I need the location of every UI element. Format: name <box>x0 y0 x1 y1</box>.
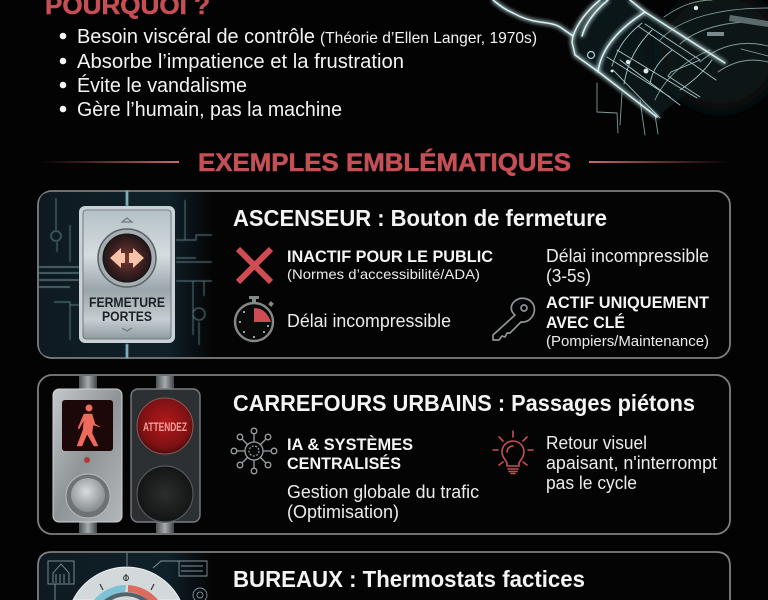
heading: BUREAUX : Thermostats factices <box>233 566 585 592</box>
feedback text: Retour visuel <box>546 433 647 453</box>
heading: ASCENSEUR : Bouton de fermeture <box>233 205 607 231</box>
icon: neural network <box>231 428 277 474</box>
ai systems text: Gestion globale du trafic <box>287 482 479 502</box>
ai systems text: (Optimisation) <box>287 502 399 522</box>
round button <box>98 229 156 287</box>
active text: (Pompiers/Maintenance) <box>546 333 709 350</box>
bullet 3: Évite le vandalisme <box>77 74 247 97</box>
bullet 1: Besoin viscéral de contrôle <box>77 26 315 48</box>
circuit nodes <box>611 60 648 74</box>
ai systems text: IA & SYSTÈMES <box>287 435 413 454</box>
finger body haze <box>572 0 725 117</box>
button plate <box>79 206 175 343</box>
panel border <box>38 552 730 600</box>
image: elevator button: PORTES <box>102 309 152 324</box>
ai systems text <box>287 435 479 522</box>
active text: AVEC CLÉ <box>546 313 625 332</box>
button label: FERMETURE <box>89 295 165 310</box>
image: elevator button <box>39 191 216 358</box>
icon: light bulb <box>493 431 533 474</box>
icon: key <box>493 298 534 340</box>
image: pedestrian signals: ATTENDEZ <box>143 422 187 434</box>
illustration: glowing circuit finger <box>493 0 768 135</box>
pedestrian unit <box>53 389 122 522</box>
inactive text: (Normes d’accessibilité/ADA) <box>287 266 480 282</box>
feedback text: apaisant, n'interrompt <box>546 453 717 473</box>
bullet 1: (Théorie d’Ellen Langer, 1970s) <box>320 30 537 47</box>
delay detail: (3-5s) <box>546 266 591 286</box>
dial segments <box>694 6 768 36</box>
bullet 2: Absorbe l’impatience et la frustration <box>77 51 404 73</box>
panel frame <box>38 191 730 358</box>
image: pedestrian signals <box>53 376 200 533</box>
dial arcs <box>597 0 768 135</box>
delay detail <box>546 246 709 286</box>
bullet list: pourquoi <box>60 26 537 121</box>
feedback text: pas le cycle <box>546 473 637 493</box>
panel: carrefours <box>38 375 730 534</box>
image: thermostat dial <box>39 553 216 600</box>
delay detail: Délai incompressible <box>546 246 709 266</box>
active text: ACTIF UNIQUEMENT <box>546 293 710 312</box>
finger outline glow <box>493 0 725 117</box>
inactive text <box>287 247 493 282</box>
panel frame <box>38 552 730 600</box>
circuit lines on finger <box>607 23 716 118</box>
icon: red cross <box>238 249 271 282</box>
icon: stopwatch <box>235 296 274 341</box>
cuff ring <box>588 52 594 58</box>
panel: bureaux <box>38 552 730 600</box>
feedback text <box>546 433 717 493</box>
dial haze <box>660 0 768 110</box>
signal unit <box>131 389 200 522</box>
panel frame <box>38 375 730 534</box>
bullet 1 <box>60 26 537 48</box>
inactive text: INACTIF POUR LE PUBLIC <box>287 247 493 266</box>
heading: CARREFOURS URBAINS : Passages piétons <box>233 390 695 416</box>
active text <box>546 293 710 350</box>
section heading: EXEMPLES EMBLÉMATIQUES <box>198 148 571 177</box>
panel: ascenseur <box>38 191 730 358</box>
ai systems text: CENTRALISÉS <box>287 454 401 473</box>
bullet 4: Gère l’humain, pas la machine <box>77 99 342 121</box>
delay text: Délai incompressible <box>287 311 451 331</box>
